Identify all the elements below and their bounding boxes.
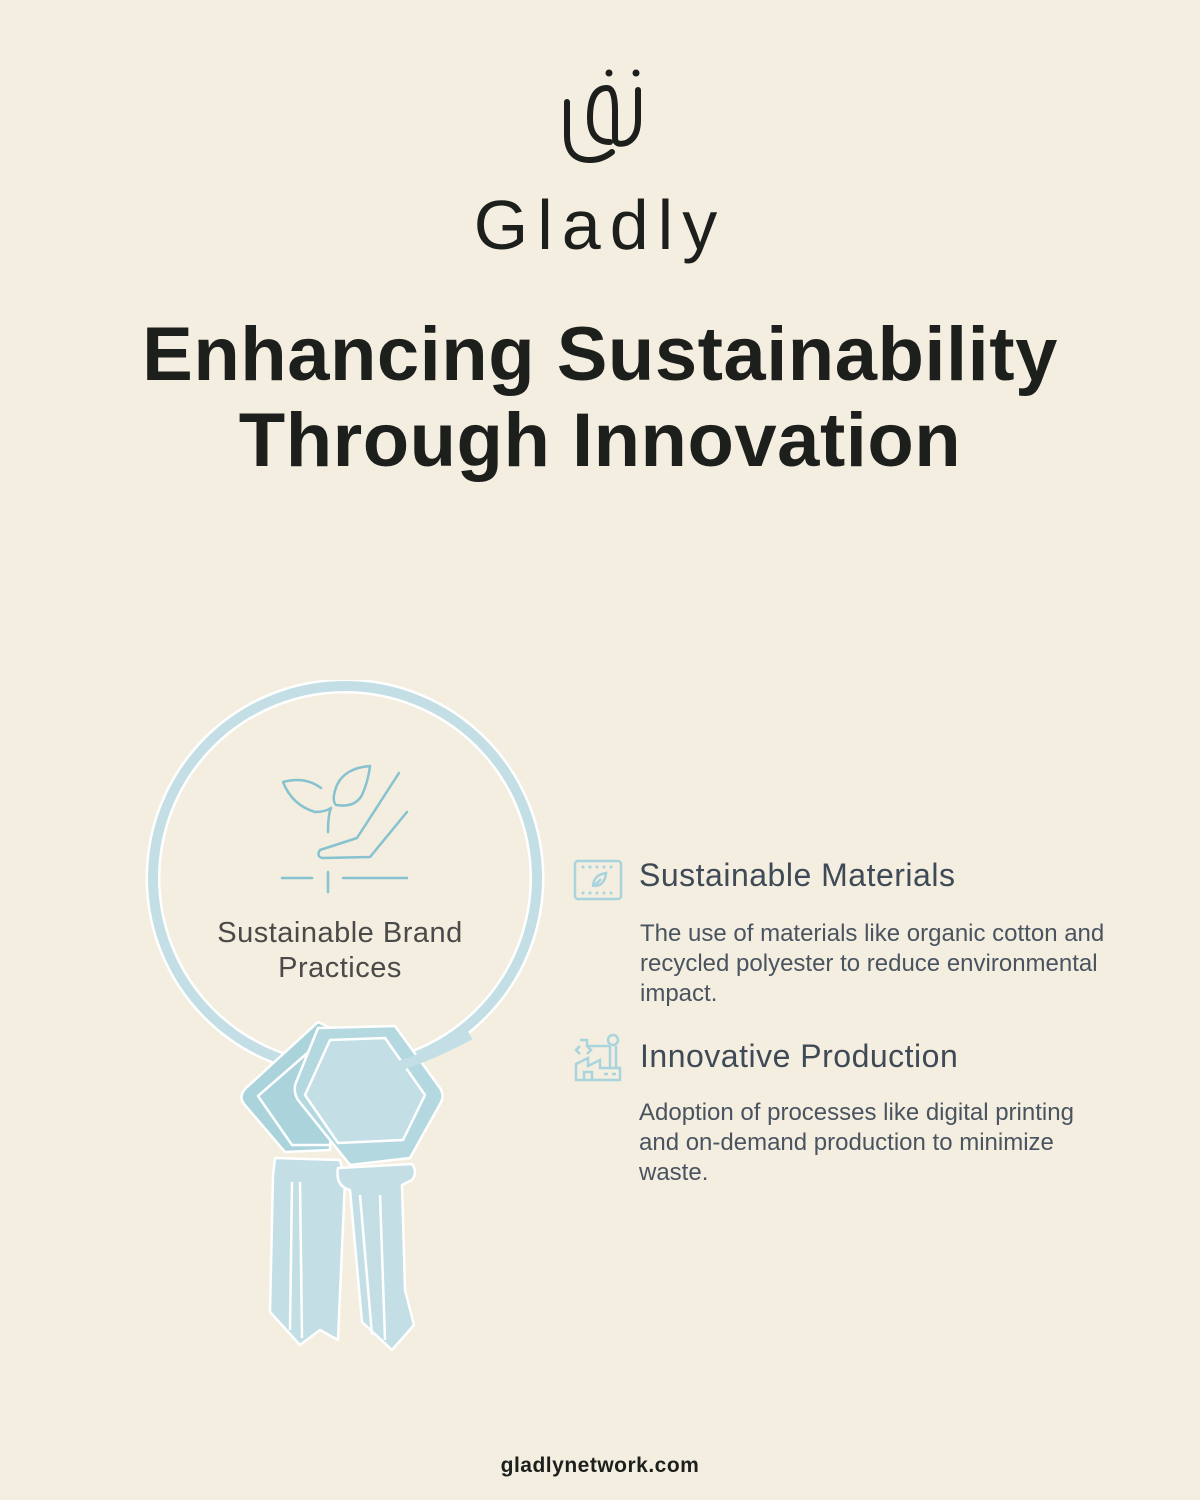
heading: Innovative Production xyxy=(640,1038,958,1074)
icon: plant in hand xyxy=(282,766,407,892)
circle label xyxy=(217,917,463,984)
icon: factory xyxy=(574,1034,622,1082)
ring xyxy=(153,686,537,1070)
title: Enhancing Sustainability xyxy=(142,312,1058,397)
circle label: Sustainable Brand xyxy=(217,917,463,949)
logo mark xyxy=(564,70,641,163)
item: innovative production xyxy=(574,1034,1074,1186)
circle label: Practices xyxy=(278,952,402,984)
heading: Sustainable Materials xyxy=(639,857,955,893)
title xyxy=(142,312,1058,483)
key ring illustration xyxy=(146,680,544,1352)
item: sustainable materials xyxy=(574,857,1104,1007)
description: Adoption of processes like digital printing and on-demand production to minimize waste. xyxy=(639,1099,1074,1186)
keys xyxy=(241,1022,470,1350)
icon: leaf film xyxy=(574,860,622,900)
description: The use of materials like organic cotton and recycled polyester to reduce environmental impact. xyxy=(640,920,1104,1007)
brand name: Gladly xyxy=(474,186,726,264)
title: Through Innovation xyxy=(239,398,961,483)
footer url: gladlynetwork.com xyxy=(501,1454,699,1477)
